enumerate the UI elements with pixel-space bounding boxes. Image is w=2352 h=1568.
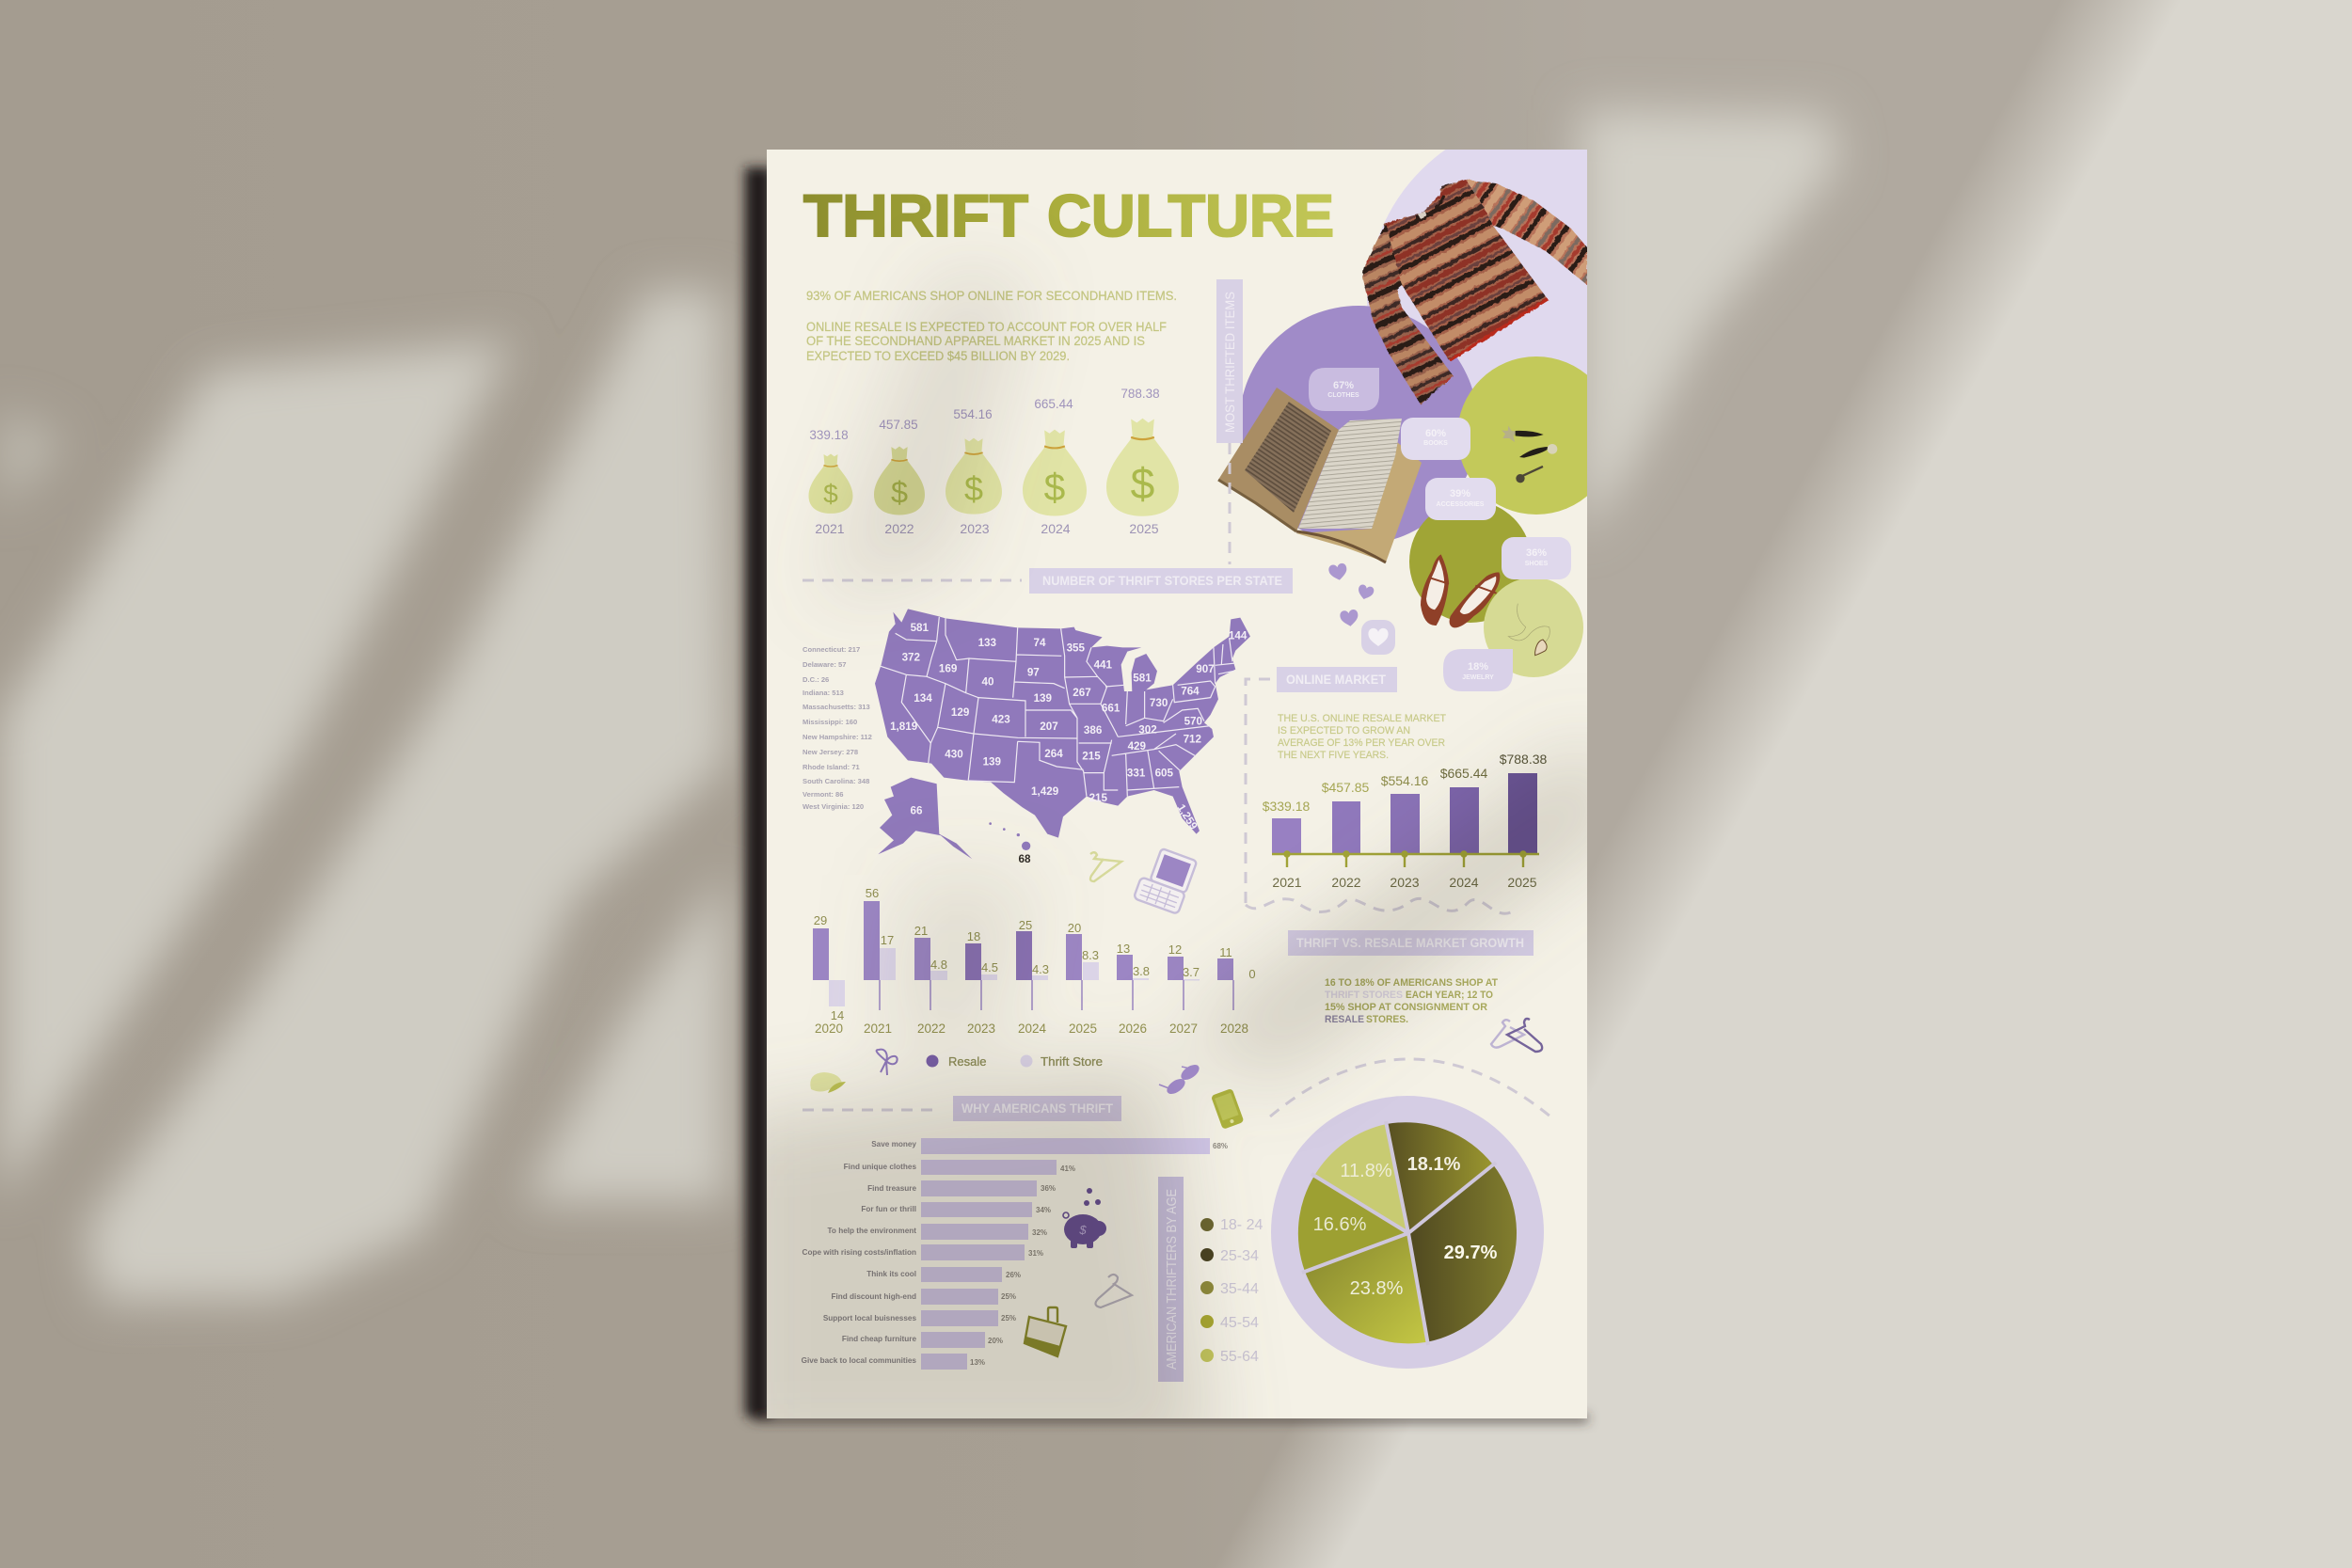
online market text: [1278, 713, 1446, 761]
values: $554.16: [1381, 773, 1429, 788]
state values: 302: [1138, 723, 1157, 736]
state values: [890, 622, 1248, 832]
bag 2025: [1106, 419, 1179, 516]
online market text: THE NEXT FIVE YEARS.: [1278, 750, 1389, 761]
bag 2022: $: [891, 475, 908, 509]
years: 2020: [815, 1022, 843, 1036]
years: 2025: [1069, 1022, 1097, 1036]
bag 2021: [809, 453, 852, 514]
poster drop shadow: [745, 167, 1588, 1421]
legend: resale and thrift store: Thrift Store: [1041, 1054, 1103, 1069]
percentages: 36%: [1041, 1184, 1056, 1193]
state values: 441: [1094, 658, 1113, 671]
bag years: [815, 521, 1159, 536]
bag 2024: $: [1044, 466, 1066, 509]
icon: hanger: [1095, 1275, 1132, 1307]
icon: flats shoes: [1421, 554, 1500, 627]
values: 20: [1068, 921, 1081, 935]
state values: 730: [1150, 697, 1168, 709]
values: [1263, 752, 1548, 814]
state values: 139: [983, 755, 1002, 768]
callout: 36% shoes: SHOES: [1525, 561, 1549, 567]
state values: 144: [1229, 629, 1248, 641]
legend: resale and thrift store: [926, 1054, 1103, 1069]
percentages: [970, 1142, 1228, 1367]
pie ring: [1271, 1096, 1544, 1369]
icon: tote bag: [1025, 1307, 1066, 1356]
category labels: For fun or thrill: [861, 1205, 916, 1213]
bag years: 2024: [1041, 521, 1071, 536]
heading: american thrifters by age: AMERICAN THRIFTERS BY AGE: [1164, 1189, 1180, 1370]
years: 2023: [967, 1022, 995, 1036]
values: 13: [1117, 942, 1130, 956]
online market text: IS EXPECTED TO GROW AN: [1278, 725, 1410, 736]
thrift text: THRIFT STORES: [1325, 990, 1403, 1001]
contiguous states: [875, 609, 1250, 838]
callout: 60% books: 60%: [1425, 428, 1446, 439]
state values: 74: [1033, 637, 1046, 649]
icon: sunglasses: [1159, 1062, 1201, 1097]
online market text: AVERAGE OF 13% PER YEAR OVER: [1278, 737, 1445, 749]
title: THRIFT: [803, 183, 1028, 249]
years: 2028: [1220, 1022, 1248, 1036]
category labels: Find cheap furniture: [842, 1335, 916, 1343]
values: 0: [1248, 967, 1256, 981]
state values: 133: [978, 637, 997, 649]
state values: 764: [1181, 686, 1200, 698]
callout: 60% books: BOOKS: [1423, 440, 1448, 447]
circle: pale lime behind jewelry: [1484, 578, 1583, 677]
small states list: Vermont: 86: [803, 790, 843, 799]
bag values: 339.18: [809, 428, 849, 442]
values: 25: [1019, 918, 1032, 932]
small states list: Rhode Island: 71: [803, 763, 861, 771]
back cover and page block: [1296, 442, 1422, 562]
slice values: [1313, 1154, 1498, 1299]
small states list: West Virginia: 120: [803, 802, 864, 811]
percentages: 20%: [988, 1337, 1003, 1345]
small states list: Mississippi: 160: [803, 718, 857, 726]
thrift store bars: [829, 948, 1200, 1006]
values: 56: [866, 886, 879, 900]
circle: lime behind accessories: [1459, 356, 1587, 515]
Hawaii: [989, 822, 1030, 850]
values: 3.8: [1133, 964, 1150, 978]
state values: 1,429: [1031, 785, 1059, 798]
category labels: Support local buisnesses: [823, 1314, 916, 1323]
slice 23.8%: [1305, 1233, 1427, 1343]
years: 2021: [1272, 875, 1302, 890]
values: 29: [814, 913, 827, 927]
years: [815, 1022, 1248, 1036]
poster sheet: [767, 150, 1587, 1418]
state values: 1,259: [1175, 802, 1200, 832]
state values: 66: [911, 804, 923, 816]
sweater photo: [1362, 180, 1587, 404]
category labels: Save money: [871, 1140, 916, 1148]
slice values: 29.7%: [1444, 1243, 1498, 1263]
state values: 605: [1155, 767, 1174, 779]
callout: 18% jewelry: [1443, 649, 1513, 691]
values: 11: [1219, 945, 1232, 959]
small states list: New Hampshire: 112: [803, 733, 872, 741]
thrift text: [1325, 977, 1498, 1025]
percentages: 34%: [1036, 1206, 1051, 1214]
heading: why americans thrift: WHY AMERICANS THRIFT: [961, 1101, 1113, 1116]
values: 21: [914, 924, 928, 938]
stems: [880, 980, 1233, 1010]
title: CULTURE: [1047, 183, 1334, 249]
circle: purple behind book: [1239, 306, 1478, 545]
slice 29.7%: [1408, 1164, 1517, 1342]
state values: 1,819: [890, 721, 918, 733]
state values: 661: [1102, 703, 1120, 715]
values: $665.44: [1440, 766, 1488, 781]
slice values: 18.1%: [1407, 1154, 1461, 1175]
state values: 267: [1073, 687, 1091, 699]
label: most thrifted items: [1216, 279, 1243, 443]
bag values: 554.16: [953, 407, 993, 421]
legend: age groups: 25-34: [1220, 1248, 1259, 1264]
bag 2024: [1023, 430, 1087, 515]
thrift text: STORES.: [1366, 1014, 1408, 1025]
state values: 430: [945, 748, 963, 760]
right page: [1298, 419, 1402, 529]
heading: online market: [1277, 667, 1397, 692]
bars: [1272, 773, 1537, 854]
state values: 907: [1196, 663, 1215, 675]
state values: 355: [1067, 642, 1086, 655]
values: 12: [1168, 942, 1182, 957]
connector: dashed lines: [803, 443, 1550, 1117]
legend: resale and thrift store: Resale: [948, 1054, 986, 1069]
small states list: Connecticut: 217: [803, 645, 860, 654]
category labels: Give back to local communities: [802, 1356, 916, 1365]
small states list: New Jersey: 278: [803, 748, 858, 756]
years: 2024: [1018, 1022, 1047, 1036]
years: 2027: [1169, 1022, 1198, 1036]
callout: 36% shoes: [1502, 537, 1571, 579]
bars: [921, 1138, 1210, 1370]
bag values: 665.44: [1034, 397, 1073, 411]
intro text: 93% OF AMERICANS SHOP ONLINE FOR SECONDHAND ITEMS.: [806, 289, 1177, 303]
percentages: 25%: [1001, 1314, 1016, 1323]
values: 18: [967, 929, 980, 943]
state values: 372: [902, 652, 921, 664]
bag 2023: [946, 438, 1002, 515]
percentages: 31%: [1028, 1249, 1043, 1258]
state values: 581: [911, 622, 930, 634]
bag values: [809, 387, 1160, 442]
intro text: EXPECTED TO EXCEED $45 BILLION BY 2029.: [806, 349, 1070, 363]
bag 2025: $: [1131, 459, 1154, 508]
state values: 129: [951, 706, 970, 719]
thrift text: RESALE: [1325, 1014, 1364, 1025]
icon: olive hanger: [1090, 852, 1121, 881]
bag 2022: [874, 447, 925, 515]
heading: american thrifters by age: [1158, 1177, 1184, 1382]
icon: necklace: [1508, 604, 1549, 656]
bag years: 2023: [960, 521, 990, 536]
callout: 18% jewelry: 18%: [1468, 661, 1488, 673]
category labels: [802, 1140, 916, 1365]
state values: 139: [1034, 692, 1053, 705]
state values: 97: [1027, 666, 1040, 678]
poster light and shadow overlay: [724, 273, 1637, 1467]
circle: pale lavender behind sweater: [1367, 150, 1587, 389]
callout: 67% clothes: CLOTHES: [1327, 392, 1359, 399]
slice 11.8%: [1314, 1124, 1408, 1233]
years: 2026: [1119, 1022, 1147, 1036]
years: 2024: [1449, 875, 1479, 890]
small states list: Indiana: 513: [803, 689, 844, 697]
state values: 429: [1128, 740, 1147, 752]
circle: olive behind shoes: [1409, 500, 1532, 623]
legend: age groups: [1200, 1217, 1263, 1365]
thrift text: 16 TO 18% OF AMERICANS SHOP AT: [1325, 977, 1498, 989]
intro text: [806, 289, 1177, 363]
years: 2022: [917, 1022, 946, 1036]
values: 3.7: [1183, 965, 1200, 979]
values: 4.5: [981, 960, 998, 974]
US map: [875, 609, 1250, 865]
icon: hearts: [1328, 562, 1375, 627]
small states list: [803, 645, 872, 811]
heading: thrift vs resale: THRIFT VS. RESALE MARKET GROWTH: [1296, 935, 1524, 950]
small states list: Massachusetts: 313: [803, 703, 870, 711]
percentages: 32%: [1032, 1228, 1047, 1237]
state values: 570: [1184, 715, 1202, 727]
years: 2022: [1331, 875, 1361, 890]
legend: age groups: 55-64: [1220, 1349, 1259, 1365]
icon: hair clips: [1502, 426, 1557, 483]
callout: 67% clothes: [1309, 368, 1379, 411]
state values: 134: [914, 692, 932, 705]
category labels: Think its cool: [866, 1270, 916, 1278]
state values: 169: [939, 662, 958, 674]
heading: thrift vs resale: [1288, 930, 1534, 956]
icon: heart button: [1361, 620, 1395, 655]
legend: age groups: 45-54: [1220, 1315, 1259, 1331]
state borders: [881, 617, 1235, 797]
bar chart: online market: [1263, 752, 1548, 890]
heading: why americans thrift: [953, 1096, 1121, 1121]
callout: 67% clothes: 67%: [1333, 380, 1354, 391]
icon: phone: [1211, 1088, 1244, 1130]
years: 2021: [864, 1022, 892, 1036]
thrift text: 15% SHOP AT CONSIGNMENT OR: [1325, 1002, 1487, 1013]
label: most thrifted items: MOST THRIFTED ITEMS: [1222, 292, 1237, 433]
heading: online market: ONLINE MARKET: [1286, 672, 1386, 687]
bar chart: thrift vs resale growth: [813, 886, 1256, 1036]
state values: 215: [1089, 792, 1108, 804]
bag 2023: $: [964, 469, 983, 508]
bag years: 2025: [1129, 521, 1159, 536]
small states list: Delaware: 57: [803, 660, 846, 669]
axis: [1272, 852, 1539, 867]
bar chart: why americans thrift: [802, 1138, 1228, 1370]
values: $788.38: [1500, 752, 1548, 767]
slice values: 16.6%: [1313, 1214, 1367, 1235]
bag values: 457.85: [879, 418, 918, 432]
resale bars: [813, 901, 1233, 980]
callout: 36% shoes: 36%: [1526, 547, 1547, 559]
callout: 39% accessories: 39%: [1450, 488, 1470, 499]
years: 2023: [1390, 875, 1420, 890]
intro text: ONLINE RESALE IS EXPECTED TO ACCOUNT FOR OVER HALF: [806, 320, 1167, 334]
legend: age groups: 18- 24: [1220, 1217, 1263, 1233]
values: $457.85: [1322, 780, 1370, 795]
state values: 40: [981, 675, 993, 688]
category labels: Cope with rising costs/inflation: [803, 1248, 916, 1257]
title: [803, 183, 1334, 249]
slice separators: [1302, 1121, 1496, 1345]
values: $339.18: [1263, 799, 1311, 814]
Alaska: [878, 778, 972, 859]
bag 2021: $: [823, 479, 838, 509]
values: [814, 886, 1256, 1022]
Hawaii value: 68: [1018, 853, 1031, 865]
intro text: OF THE SECONDHAND APPAREL MARKET IN 2025 AND IS: [806, 334, 1145, 348]
icon: ribbon bow: [877, 1050, 898, 1075]
slice 18.1%: [1387, 1122, 1493, 1233]
percentages: 41%: [1060, 1164, 1075, 1173]
state values: 264: [1044, 748, 1063, 760]
percentages: 68%: [1213, 1142, 1228, 1150]
poster content: [767, 150, 1587, 1418]
icon: two hangers: [1491, 1019, 1542, 1052]
heading: number of thrift stores per state: NUMBER OF THRIFT STORES PER STATE: [1042, 573, 1282, 588]
money bag chart: [809, 387, 1179, 536]
small states list: D.C.: 26: [803, 675, 829, 684]
category labels: Find unique clothes: [844, 1163, 916, 1171]
values: 17: [881, 933, 894, 947]
callout: 60% books: [1401, 418, 1470, 460]
slice 16.6%: [1298, 1176, 1408, 1272]
values: 8.3: [1082, 948, 1099, 962]
callout: 18% jewelry: JEWELRY: [1462, 674, 1494, 681]
icon: piggy bank: $: [1078, 1223, 1087, 1237]
icon: cap: [810, 1072, 846, 1093]
state values: 207: [1040, 721, 1058, 733]
small states list: South Carolina: 348: [803, 777, 869, 785]
pie chart: thrifters by age: [1271, 1096, 1544, 1369]
spine edge: [1296, 531, 1386, 562]
state values: 331: [1127, 767, 1146, 779]
heading: number of thrift stores per state: [1029, 568, 1293, 594]
online market text: THE U.S. ONLINE RESALE MARKET: [1278, 713, 1446, 724]
category labels: Find discount high-end: [831, 1292, 916, 1301]
state values: 423: [992, 714, 1010, 726]
percentages: 25%: [1001, 1292, 1016, 1301]
icon: piggy bank: [1063, 1188, 1106, 1248]
category labels: Find treasure: [867, 1184, 916, 1193]
years: [1272, 875, 1537, 890]
legend: age groups: 35-44: [1220, 1281, 1259, 1297]
category labels: To help the environment: [828, 1227, 916, 1235]
percentages: 26%: [1006, 1271, 1021, 1279]
left page: [1218, 388, 1339, 531]
values: 4.3: [1032, 962, 1049, 976]
state values: 386: [1084, 724, 1103, 736]
values: 4.8: [930, 958, 947, 972]
slice values: 23.8%: [1350, 1278, 1404, 1299]
slice values: 11.8%: [1340, 1161, 1392, 1181]
state values: 581: [1133, 672, 1152, 684]
values: 14: [831, 1008, 844, 1022]
thrift text: EACH YEAR; 12 TO: [1406, 990, 1493, 1001]
years: 2025: [1507, 875, 1537, 890]
bag values: 788.38: [1120, 387, 1160, 401]
icon: laptop: [1134, 845, 1197, 914]
state values: 215: [1082, 751, 1101, 763]
callout: 39% accessories: [1425, 478, 1496, 520]
callout: 39% accessories: ACCESSORIES: [1437, 501, 1485, 508]
state values: 712: [1184, 733, 1202, 745]
book photo: [1218, 388, 1422, 562]
bag years: 2022: [884, 521, 914, 536]
bag years: 2021: [815, 521, 845, 536]
percentages: 13%: [970, 1358, 985, 1367]
